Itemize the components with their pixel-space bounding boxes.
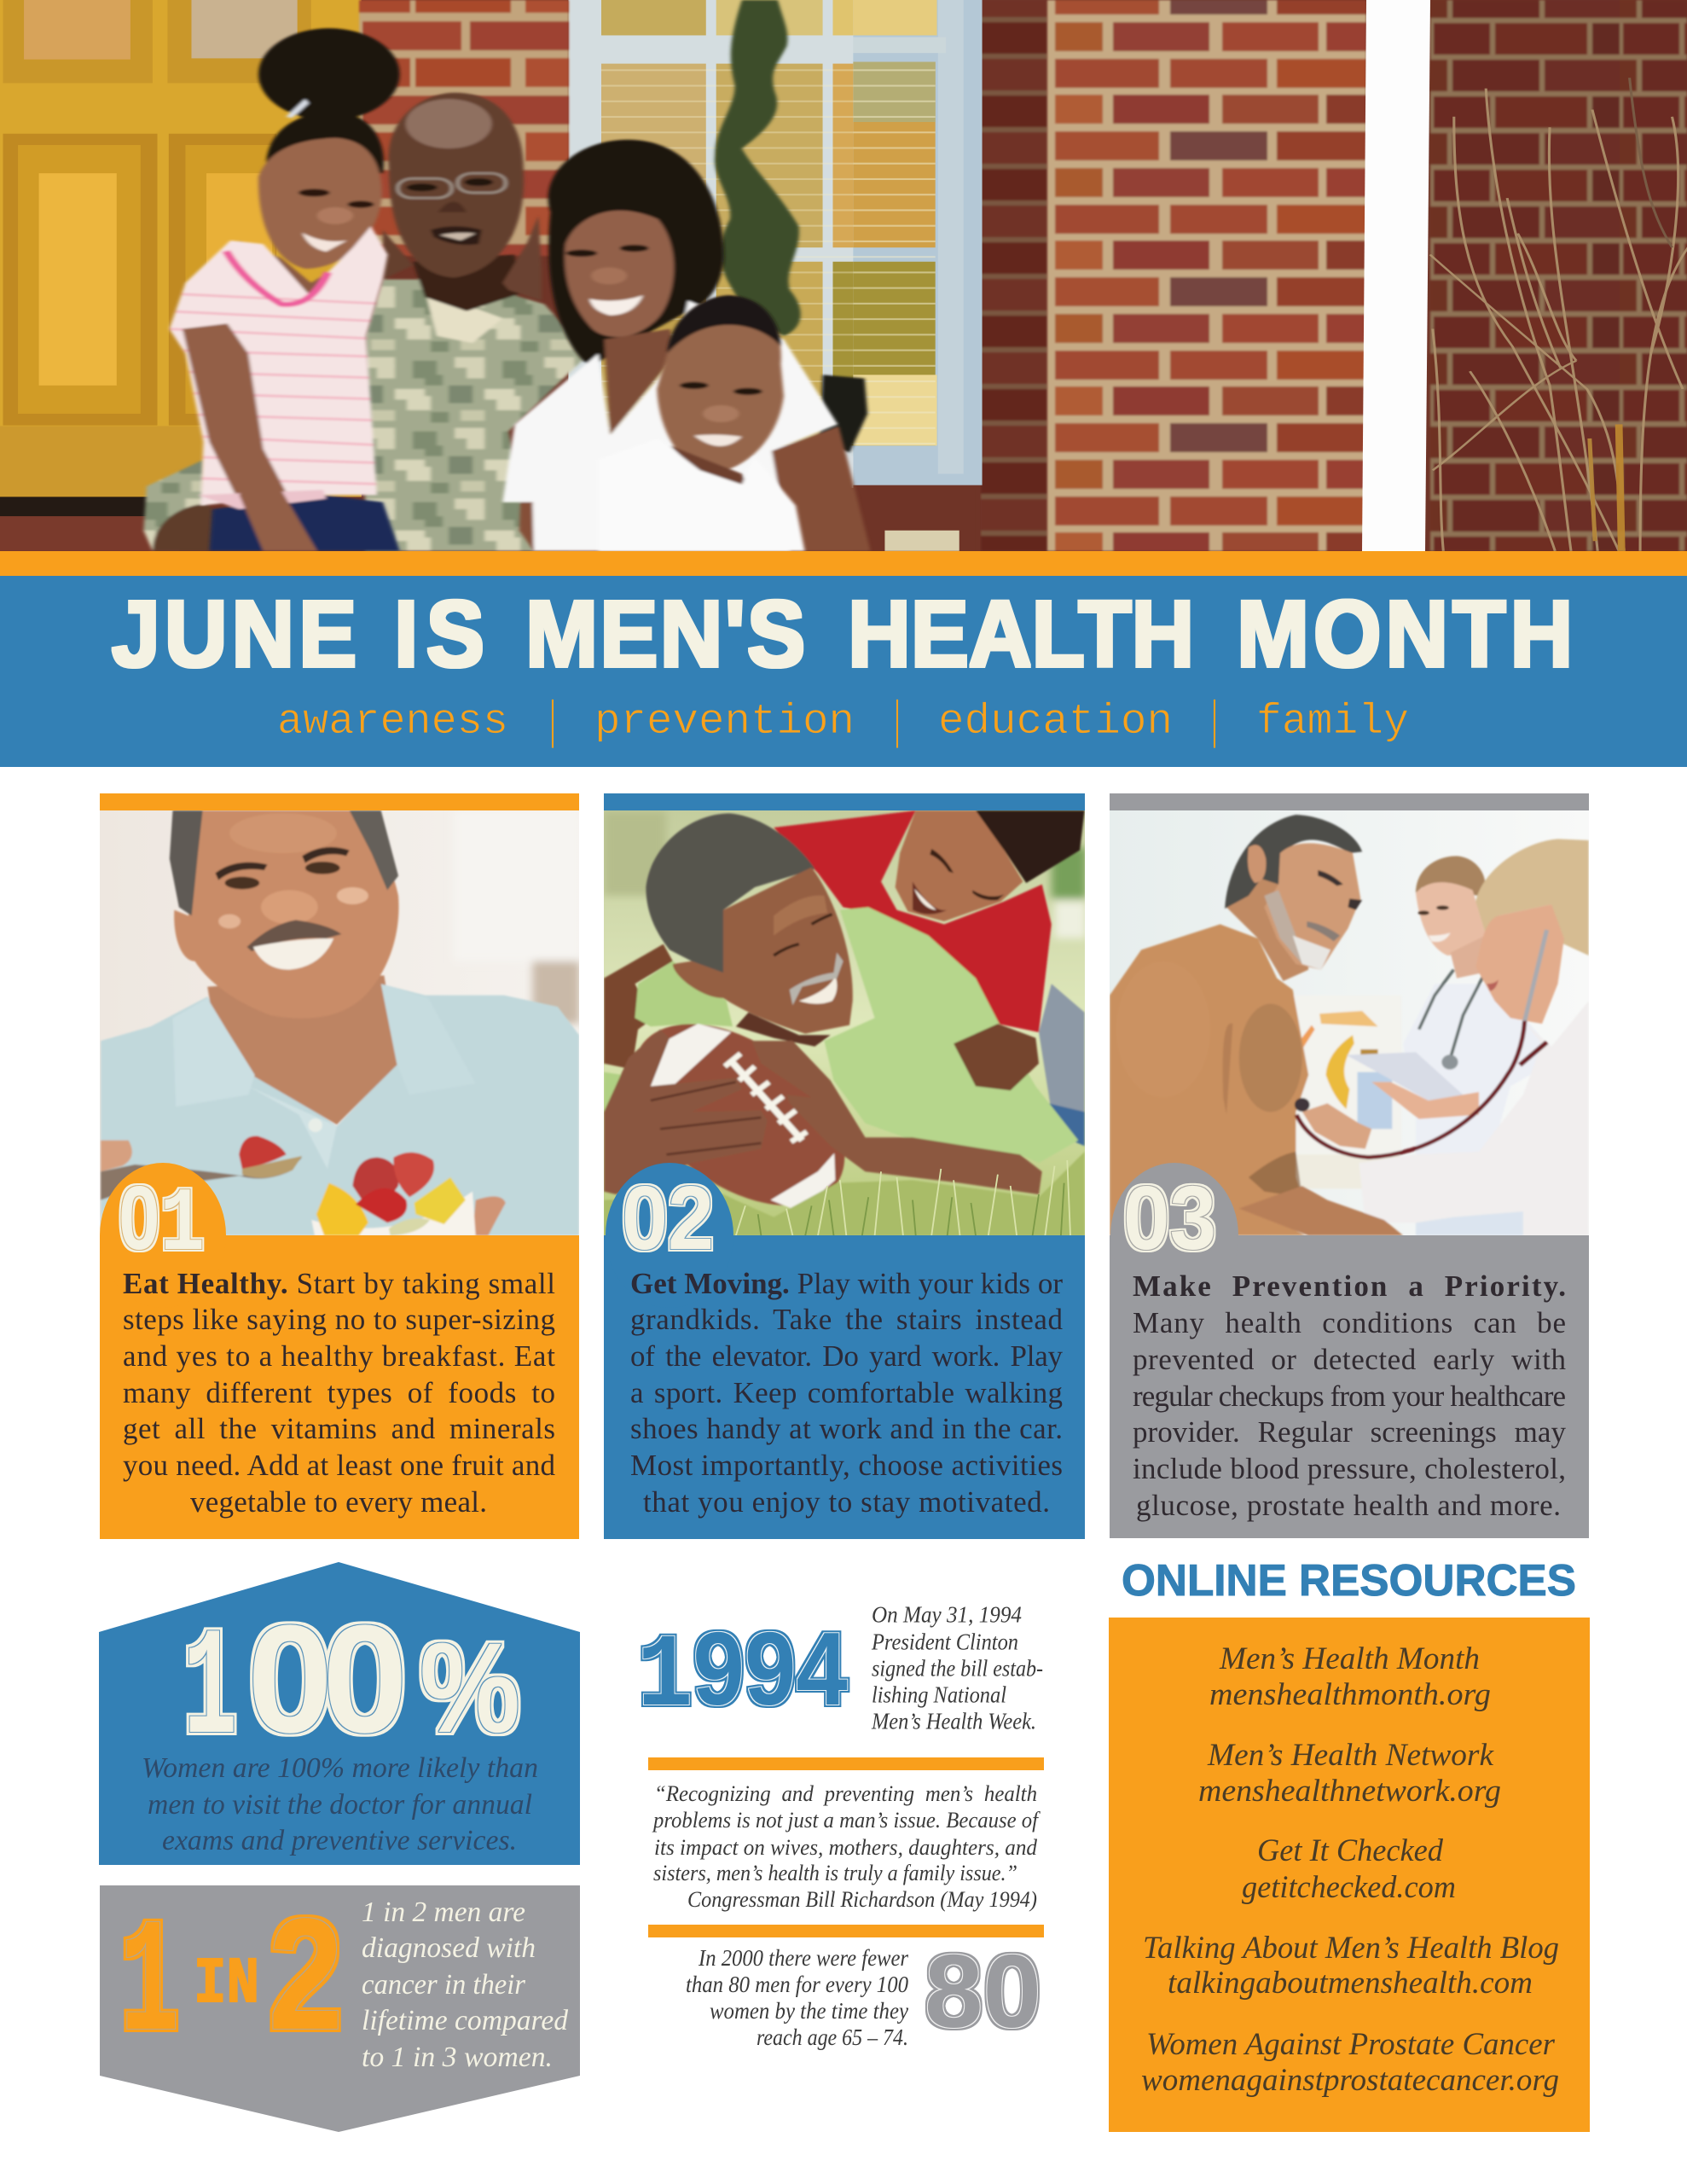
- text: bill signed: Men’s Health Week.: [871, 1708, 1036, 1734]
- text: get moving: [630, 1267, 1063, 1519]
- title: [112, 582, 1573, 687]
- text: make prevention a priority: regular checkups from your healthcare: [1133, 1380, 1566, 1413]
- blue text card: [604, 1235, 1085, 1539]
- text: bill signed: President Clinton: [871, 1629, 1018, 1655]
- title: IS: [394, 582, 484, 687]
- text: fewer men: women by the time they: [710, 1998, 908, 2024]
- stat panel: 1 in 2: [100, 1885, 580, 2132]
- big text 1 in 2: IN: [194, 1948, 259, 2021]
- panel 01: eat healthy: [100, 793, 580, 1539]
- panel: online resources list: [1109, 1618, 1590, 2132]
- mother: [502, 140, 871, 551]
- subtitle: awareness, prevention, education, family: education: [938, 698, 1173, 746]
- big number 100%: 00: [247, 1594, 408, 1765]
- text: fewer men: than 80 men for every 100: [686, 1972, 908, 1997]
- resource links: Women Against Prostate Cancer: [1146, 2027, 1556, 2062]
- resource links: Get It Checked: [1257, 1833, 1443, 1868]
- text: cancer diagnosis: to 1 in 3 women.: [362, 2042, 553, 2073]
- resource links: menshealthmonth.org: [1209, 1677, 1491, 1712]
- quote from Congressman Bill Richardson: [652, 1781, 1041, 1912]
- text: fewer men: reach age 65 – 74.: [757, 2024, 908, 2050]
- orange rule above quote: [648, 1757, 1044, 1770]
- heading: online resources: ONLINE RESOURCES: [1122, 1556, 1576, 1606]
- big text 1 in 2: 2: [269, 1886, 343, 2063]
- text: women more likely: exams and preventive services.: [162, 1825, 517, 1856]
- text: cancer diagnosis: diagnosed with: [362, 1932, 536, 1964]
- text: women more likely: [142, 1752, 538, 1856]
- grey text card: [1110, 1235, 1589, 1538]
- text: eat healthy: vegetable to every meal.: [190, 1485, 487, 1519]
- text: eat healthy: [123, 1267, 556, 1519]
- text: get moving: shoes handy at work and in the car.: [630, 1412, 1063, 1445]
- quote from Congressman Bill Richardson: sisters, men’s health is truly a family issue.”: [653, 1861, 1017, 1885]
- text: eat healthy: many different types of foods to: [123, 1376, 555, 1409]
- window, right part: [853, 0, 983, 551]
- photo: smiling man with fruit bowl: [100, 810, 580, 1235]
- resource links: getitchecked.com: [1242, 1870, 1456, 1905]
- father: [143, 93, 589, 551]
- subtitle: awareness, prevention, education, family: family: [1256, 698, 1409, 746]
- quote from Congressman Bill Richardson: Congressman Bill Richardson (May 1994): [687, 1887, 1037, 1912]
- text: fewer men: [686, 1945, 908, 2050]
- text: get moving: Get Moving. Play with your kids or: [630, 1267, 1063, 1300]
- blue title banner: [0, 576, 1687, 767]
- orange text card: [100, 1235, 579, 1539]
- cypress topiary and planter: [715, 0, 867, 453]
- quote from Congressman Bill Richardson: problems is not just a man’s issue. Because of: [652, 1808, 1041, 1833]
- text: make prevention a priority: provider. Regular screenings may: [1133, 1415, 1566, 1449]
- text: get moving: of the elevator. Do yard work. Play: [630, 1339, 1063, 1373]
- bare shrub branches: [1430, 78, 1687, 551]
- photo: grandfather and grandson with football: [595, 810, 1087, 1240]
- panel 03: make prevention a priority: [1110, 793, 1589, 1538]
- hero photo: family in front of a brick house: [0, 0, 1687, 551]
- subtitle: awareness, prevention, education, family: |: [1211, 691, 1218, 749]
- big number 100%: %: [420, 1616, 520, 1759]
- text: get moving: a sport. Keep comfortable walking: [630, 1376, 1063, 1409]
- number badge 03: 03: [1123, 1168, 1216, 1269]
- text: women more likely: men to visit the doctor for annual: [148, 1789, 532, 1821]
- text: bill signed: [871, 1602, 1043, 1734]
- number badge 02: [606, 1163, 733, 1308]
- number badge 02: 02: [622, 1168, 714, 1269]
- son: [599, 295, 805, 551]
- door, bricks and window, left part: [0, 0, 853, 551]
- grass blades: [735, 1160, 1071, 1235]
- text: eat healthy: steps like saying no to super-sizing: [123, 1303, 555, 1336]
- orange band under the hero photo: [0, 551, 1687, 576]
- text: get moving: that you enjoy to stay motivated.: [643, 1485, 1050, 1519]
- quote from Congressman Bill Richardson: its impact on wives, mothers, daughters, and: [654, 1835, 1038, 1860]
- quote from Congressman Bill Richardson: “Recognizing and preventing men’s health: [654, 1781, 1037, 1806]
- orange rule below quote: [648, 1925, 1044, 1937]
- resource links: womenagainstprostatecancer.org: [1141, 2063, 1559, 2098]
- number badge 01: 01: [119, 1168, 205, 1276]
- subtitle: awareness, prevention, education, family: awareness: [277, 698, 508, 746]
- fact: 1994: [637, 1602, 1043, 1736]
- text: eat healthy: and yes to a healthy breakfast. Eat: [123, 1339, 555, 1373]
- text: women more likely: Women are 100% more likely than: [142, 1752, 538, 1784]
- resource links: Talking About Men’s Health Blog: [1143, 1931, 1559, 1966]
- big number 100%: [183, 1594, 520, 1779]
- orange header bar: [100, 793, 579, 810]
- title: MEN'S: [525, 582, 805, 687]
- text: make prevention a priority: glucose, prostate health and more.: [1136, 1489, 1561, 1522]
- number badge 03: [1110, 1163, 1238, 1308]
- brick wall and white column, right side: [0, 0, 1687, 551]
- text: make prevention a priority: prevented or detected early with: [1133, 1343, 1566, 1376]
- family group: [143, 28, 871, 551]
- subtitle: awareness, prevention, education, family: |: [894, 691, 901, 749]
- text: cancer diagnosis: 1 in 2 men are: [362, 1896, 525, 1928]
- text: make prevention a priority: Many health conditions can be: [1133, 1306, 1566, 1339]
- text: make prevention a priority: include blood pressure, cholesterol,: [1133, 1452, 1566, 1485]
- photo: doctor examining patient: [1110, 810, 1589, 1235]
- big text 1 in 2: 1: [120, 1895, 179, 2078]
- text: cancer diagnosis: cancer in their: [362, 1969, 526, 2001]
- big text 1 in 2: [120, 1886, 343, 2078]
- resource links: menshealthnetwork.org: [1198, 1774, 1501, 1809]
- stat panel: 100%: [99, 1562, 580, 1865]
- subtitle: awareness, prevention, education, family: |: [549, 691, 556, 749]
- number badge 01: [100, 1163, 226, 1308]
- text: get moving: grandkids. Take the stairs instead: [630, 1303, 1063, 1336]
- text: cancer diagnosis: [362, 1896, 569, 2073]
- text: bill signed: lishing National: [872, 1682, 1006, 1708]
- resource links: [1141, 1641, 1559, 2098]
- text: cancer diagnosis: lifetime compared: [362, 2005, 569, 2036]
- girl: [167, 28, 400, 551]
- grey header bar: [1110, 793, 1589, 810]
- text: eat healthy: Eat Healthy. Start by taking small: [123, 1267, 555, 1300]
- text: make prevention a priority: Make Prevention a Priority.: [1133, 1269, 1566, 1303]
- text: bill signed: signed the bill estab-: [872, 1655, 1043, 1681]
- resource links: Men’s Health Network: [1207, 1738, 1494, 1773]
- fact: 80 men per 100 women: [686, 1933, 1041, 2050]
- title: MONTH: [1237, 582, 1573, 687]
- big number 80: 80: [925, 1933, 1041, 2049]
- text: eat healthy: get all the vitamins and minerals: [123, 1412, 555, 1445]
- resource links: Men’s Health Month: [1219, 1641, 1480, 1676]
- text: eat healthy: you need. Add at least one fruit and: [123, 1449, 556, 1482]
- title: JUNE: [112, 582, 357, 687]
- big number 100%: 1: [183, 1605, 237, 1779]
- resource links: talkingaboutmenshealth.com: [1168, 1966, 1533, 2001]
- text: bill signed: On May 31, 1994: [872, 1602, 1022, 1628]
- big number 1994: 1994: [637, 1611, 848, 1736]
- blue header bar: [604, 793, 1085, 810]
- text: fewer men: In 2000 there were fewer: [698, 1945, 908, 1971]
- text: get moving: Most importantly, choose activities: [630, 1449, 1063, 1482]
- subtitle: awareness, prevention, education, family: [277, 691, 1409, 749]
- panel 02: get moving: [595, 793, 1087, 1539]
- subtitle: awareness, prevention, education, family: prevention: [594, 698, 855, 746]
- text: make prevention a priority: [1133, 1269, 1566, 1522]
- title: HEALTH: [848, 582, 1194, 687]
